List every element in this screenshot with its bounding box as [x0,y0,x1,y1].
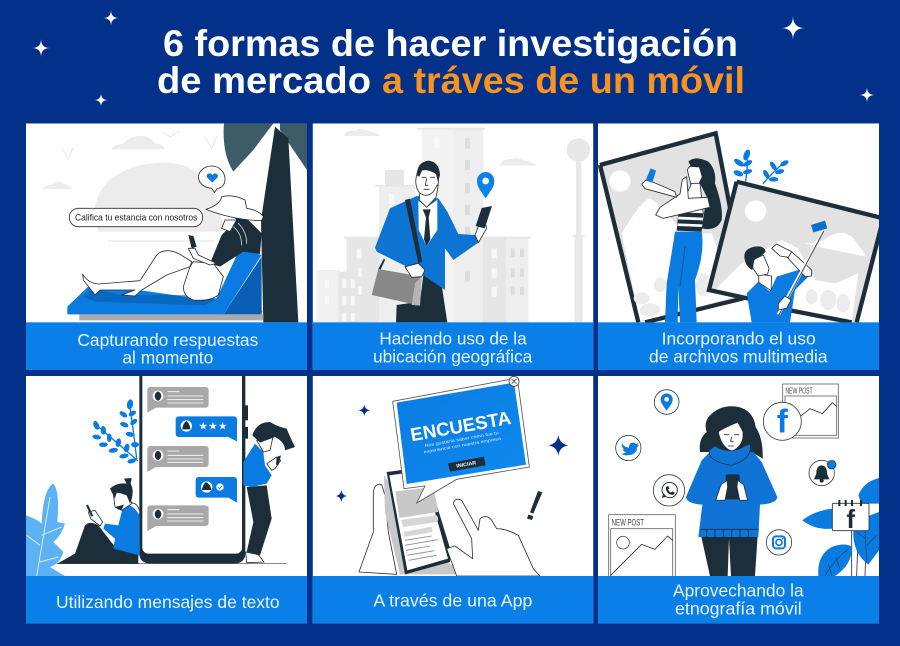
ground line [56,563,287,564]
title: 6 formas de hacer investigación [163,23,738,64]
photo frame left [600,133,743,322]
photo frame right [708,182,883,322]
chat bubble gray 2 [147,446,209,472]
man taking selfie with stick [744,221,827,322]
blue leaves and calendar: f [846,504,855,534]
heart bubble [199,166,225,193]
caption bar: Utilizando mensajes de texto [56,592,280,612]
button: iniciar: INICIAR [456,460,477,470]
new post card left [609,515,675,578]
icon: whatsapp [653,475,685,506]
panel: capturando respuestas [26,123,307,370]
title: a tráves de un móvil [382,60,745,101]
close button [509,376,519,386]
chat bubble blue rating: ★★★ [198,420,228,432]
standing woman [243,422,295,563]
caption bar: A través de una App [373,590,533,610]
title [157,23,745,101]
plant [733,149,790,185]
caption bar: ubicación geográfica [373,346,532,366]
icon: map pin [477,172,494,198]
speech bubble: rating: Califica tu estancia con nosotros [75,212,198,222]
caption bar: Incorporando el uso [662,328,816,348]
survey popup: ENCUESTA [409,407,512,445]
phone with app [384,470,456,574]
woman taking selfie [642,158,722,322]
big light-blue leaf [26,484,65,576]
caption bar [313,576,593,624]
city background [317,128,590,322]
caption bar [598,322,879,370]
left hand [359,484,397,574]
panel: ubicación geográfica [313,123,593,370]
blue plant [92,399,139,464]
man in blue suit [372,161,492,322]
icon: map pin [654,390,679,414]
caption bar [313,322,593,370]
caption bar [598,576,879,624]
lounger [67,248,263,320]
chat bubble gray 1 [147,387,209,413]
caption bar: Haciendo uso de la [379,328,527,348]
panel: a través de una app [313,376,593,624]
speech bubble: rating [69,208,203,227]
caption bar: Capturando respuestas [77,330,258,350]
navy sparkles [336,405,568,502]
new post card left: NEW POST [612,517,644,527]
chat bubble blue rating [176,416,237,441]
blue leaves and calendar [802,478,879,576]
icon: twitter [616,435,641,461]
phone with chat [139,362,248,563]
exclamation mark [527,491,542,520]
panel: mensajes de texto [26,362,307,624]
icon: instagram [766,530,792,555]
caption bar [26,322,307,370]
survey popup: Nos gustaría saber cómo fue tu [424,430,500,448]
panel: etnografía móvil [598,376,879,624]
woman reading phone [83,196,263,300]
beach background [42,131,225,242]
caption bar [26,576,307,624]
new post card right [783,384,838,438]
caption bar: de archivos multimedia [649,346,828,366]
caption bar: Aprovechando la [673,580,804,600]
panel: archivos multimedia [598,123,883,370]
palm tree [224,123,307,322]
right hand [447,499,540,576]
chat bubble gray 3 [147,505,209,531]
decorative stars [32,10,875,107]
caption bar: etnografía móvil [675,598,802,618]
woman with phone [686,406,777,576]
chat bubble blue check [196,477,237,503]
caption bar: al momento [122,347,214,367]
icon: bell [809,460,836,486]
title: de mercado [157,60,371,101]
seated man [57,478,140,564]
survey popup [393,376,529,503]
icon: facebook: f [777,403,789,440]
icon: facebook [763,402,801,440]
new post card right: NEW POST [785,385,813,395]
survey popup: experiencia con nuestra empresa [423,436,502,454]
